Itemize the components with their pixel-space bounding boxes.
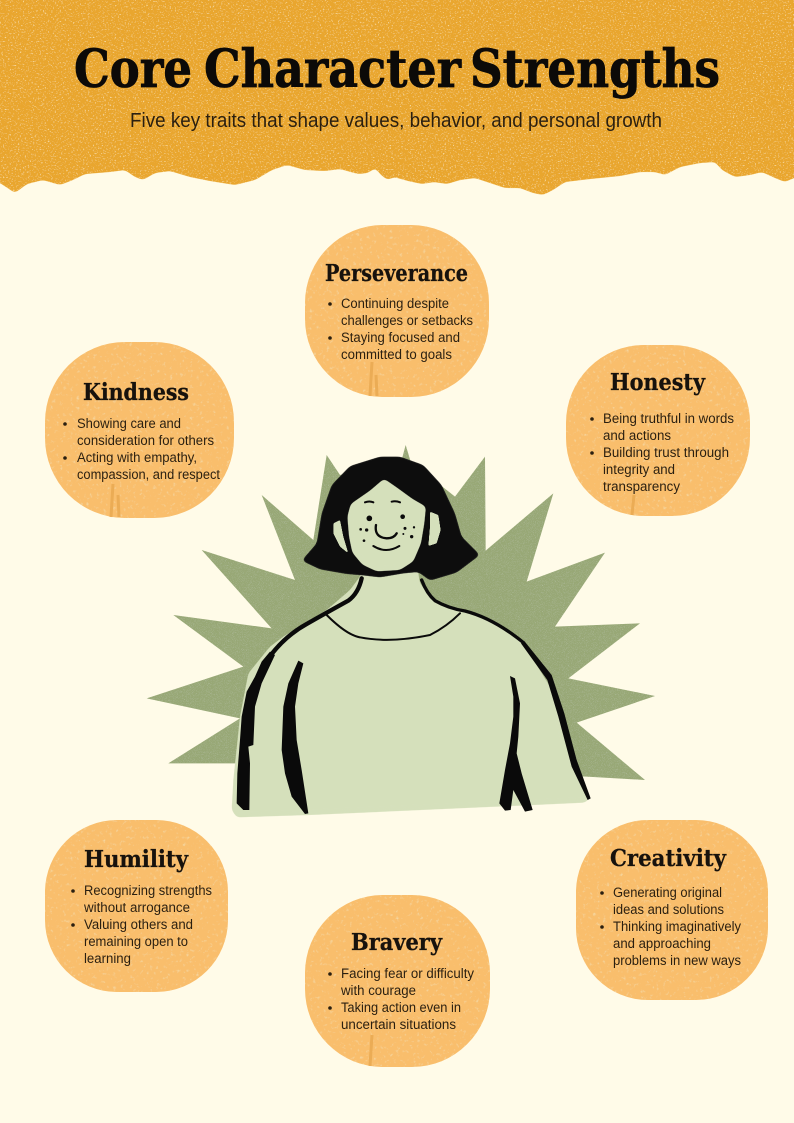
- bullet list: consideration for others: [77, 433, 214, 448]
- bullet list: learning: [84, 951, 131, 966]
- bullet list: Staying focused and: [341, 330, 460, 345]
- bullet list: Valuing others and: [84, 917, 193, 932]
- panel: Kindness: [45, 342, 234, 518]
- body: [232, 563, 590, 817]
- bullet list: problems in new ways: [613, 953, 741, 968]
- bullet list: [63, 416, 220, 482]
- bullet list: Acting with empathy,: [77, 450, 197, 465]
- title: Character: [204, 39, 462, 100]
- heading: Humility: [84, 846, 189, 873]
- panel: Humility: [45, 820, 228, 992]
- blob: [576, 820, 768, 1000]
- right inner arm line: [499, 676, 533, 812]
- bullet list: [328, 296, 473, 362]
- bullet list: Building trust through: [603, 445, 729, 460]
- heading: Creativity: [610, 845, 727, 872]
- panel: Perseverance: [305, 225, 489, 397]
- ear left: [333, 520, 348, 553]
- bullet list: committed to goals: [341, 347, 452, 362]
- starburst: [147, 445, 655, 780]
- bullet list: ideas and solutions: [613, 902, 724, 917]
- title: Strengths: [470, 39, 720, 100]
- subtitle: Five key traits that shape values, behavior, and personal growth: [130, 110, 662, 132]
- left outer arm line: [237, 652, 275, 810]
- title: Core: [74, 39, 192, 100]
- bullet list: transparency: [603, 479, 680, 494]
- blob: [45, 820, 228, 992]
- bullet list: and actions: [603, 428, 671, 443]
- bullet list: Recognizing strengths: [84, 883, 212, 898]
- neck and shoulder strokes: [272, 578, 523, 654]
- clothing outlines: [237, 578, 591, 814]
- face: [347, 479, 426, 571]
- bullet list: compassion, and respect: [77, 467, 220, 482]
- illustration: person with starburst: [147, 445, 655, 817]
- bullet list: uncertain situations: [341, 1017, 456, 1032]
- right outer arm line: [521, 641, 591, 800]
- bullet list: remaining open to: [84, 934, 188, 949]
- heading: Perseverance: [325, 260, 468, 287]
- bullet list: Showing care and: [77, 416, 181, 431]
- blob: [305, 895, 490, 1067]
- panel: Honesty: [566, 345, 750, 516]
- bullet list: Facing fear or difficulty: [341, 966, 474, 981]
- panel: Creativity: [576, 820, 768, 1000]
- heading: Bravery: [351, 929, 443, 956]
- bullet list: [600, 885, 741, 968]
- ear right: [428, 512, 441, 546]
- bullet list: and approaching: [613, 936, 711, 951]
- blob: [566, 345, 750, 516]
- facial features: [359, 501, 415, 550]
- header band with torn edge: [0, 0, 794, 195]
- bullet list: [71, 883, 212, 966]
- bullet list: Thinking imaginatively: [613, 919, 741, 934]
- bullet list: [590, 411, 734, 494]
- bullet list: Being truthful in words: [603, 411, 734, 426]
- heading: Honesty: [610, 369, 706, 396]
- blob: [45, 342, 234, 518]
- bullet list: Generating original: [613, 885, 722, 900]
- left inner arm line: [282, 661, 308, 814]
- blob: [305, 225, 489, 397]
- bullet list: challenges or setbacks: [341, 313, 473, 328]
- hair: [302, 457, 480, 581]
- bullet list: integrity and: [603, 462, 675, 477]
- panel: Bravery: [305, 895, 490, 1067]
- bullet list: without arrogance: [83, 900, 190, 915]
- bullet list: Continuing despite: [341, 296, 449, 311]
- bullet list: with courage: [340, 983, 416, 998]
- title: [74, 39, 720, 100]
- bullet list: Taking action even in: [341, 1000, 461, 1015]
- bullet list: [328, 966, 474, 1032]
- heading: Kindness: [83, 379, 189, 406]
